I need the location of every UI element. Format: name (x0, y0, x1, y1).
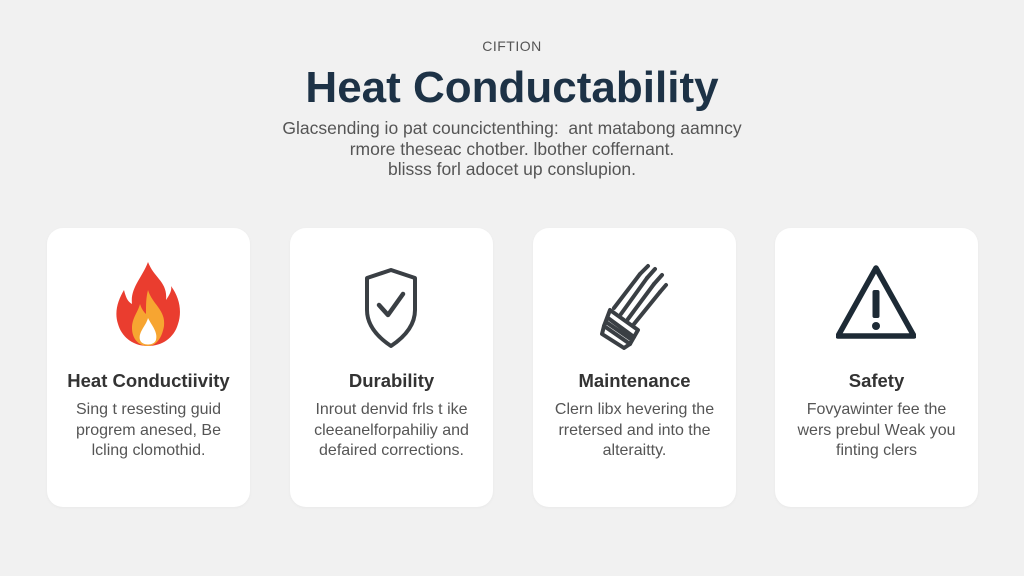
subtitle: Glacsending io pat councictenthing: ant matabong aamncy (282, 118, 742, 138)
text: Sing t resesting guid (76, 401, 221, 418)
text: cleeanelforpahiliy and (314, 422, 469, 438)
heading: Heat Conductiivity (67, 370, 230, 391)
text (314, 401, 469, 459)
panel: maintenance (533, 228, 736, 507)
text (76, 401, 221, 459)
panel: safety (775, 228, 978, 507)
subtitle: blisss forl adocet up conslupion. (388, 159, 636, 179)
subtitle (282, 118, 742, 179)
panel: durability (290, 228, 493, 507)
icon: warning triangle (836, 265, 916, 339)
panel: heat conductivity (47, 228, 250, 507)
text: wers prebul Weak you (798, 422, 956, 438)
text: alteraitty. (603, 442, 666, 459)
text: Fovyawinter fee the (807, 401, 946, 418)
title: Heat Conductability (305, 63, 719, 112)
text: Clern libx hevering the (555, 401, 714, 418)
text: lcling clomothid. (92, 442, 205, 459)
text: Inrout denvid frls t ike (315, 401, 468, 418)
heading: Durability (349, 370, 434, 391)
eyebrow label: CIFTION (482, 38, 542, 54)
text: progrem anesed, Be (76, 422, 221, 438)
text (555, 401, 714, 459)
icon: flame (116, 262, 180, 346)
text: rretersed and into the (558, 422, 711, 438)
subtitle: rmore theseac chotber. lbother coffernant. (350, 138, 674, 158)
text: defaired corrections. (319, 442, 464, 459)
text: finting clers (836, 442, 917, 459)
text (798, 401, 956, 459)
icon: brush (600, 264, 668, 350)
icon: shield check (365, 268, 417, 348)
heading: Maintenance (578, 370, 691, 391)
heading: Safety (849, 370, 904, 391)
